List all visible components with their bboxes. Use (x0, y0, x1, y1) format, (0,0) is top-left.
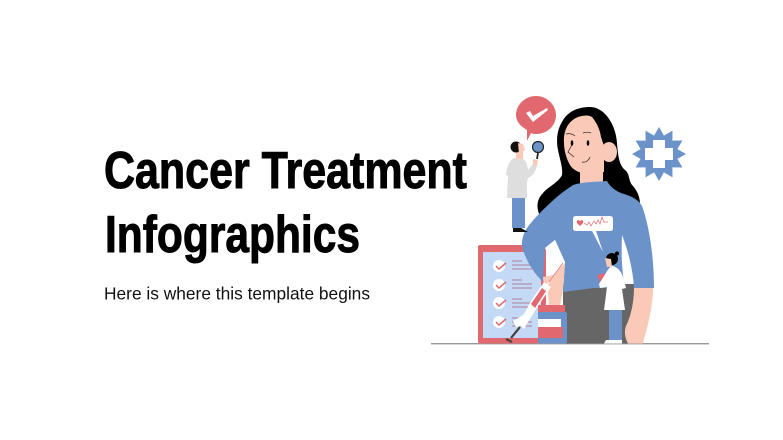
medicine bottle (538, 305, 567, 344)
face (564, 116, 604, 174)
speech label: heartbeat (573, 216, 613, 252)
blue sweater (522, 181, 654, 292)
small doctor with white coat (597, 252, 626, 344)
facial features (566, 132, 591, 162)
illustration (431, 96, 709, 344)
grey trousers (563, 284, 634, 344)
title (104, 142, 467, 264)
speech bubble with check mark (516, 96, 556, 141)
ground line (431, 343, 709, 344)
title: Infographics (105, 206, 360, 264)
hair (537, 107, 640, 218)
icon: medical star badge (632, 127, 686, 181)
syringe (506, 263, 563, 342)
neck (580, 165, 603, 187)
small doctor with magnifier (506, 142, 544, 232)
woman (522, 107, 654, 344)
ear (601, 142, 617, 162)
right arm and hand (625, 288, 653, 344)
title: Cancer Treatment (104, 142, 467, 200)
clipboard checklist (478, 245, 546, 344)
left hand (543, 263, 565, 306)
subtitle: Here is where this template begins (104, 284, 370, 304)
sleeve cuff (545, 240, 565, 275)
